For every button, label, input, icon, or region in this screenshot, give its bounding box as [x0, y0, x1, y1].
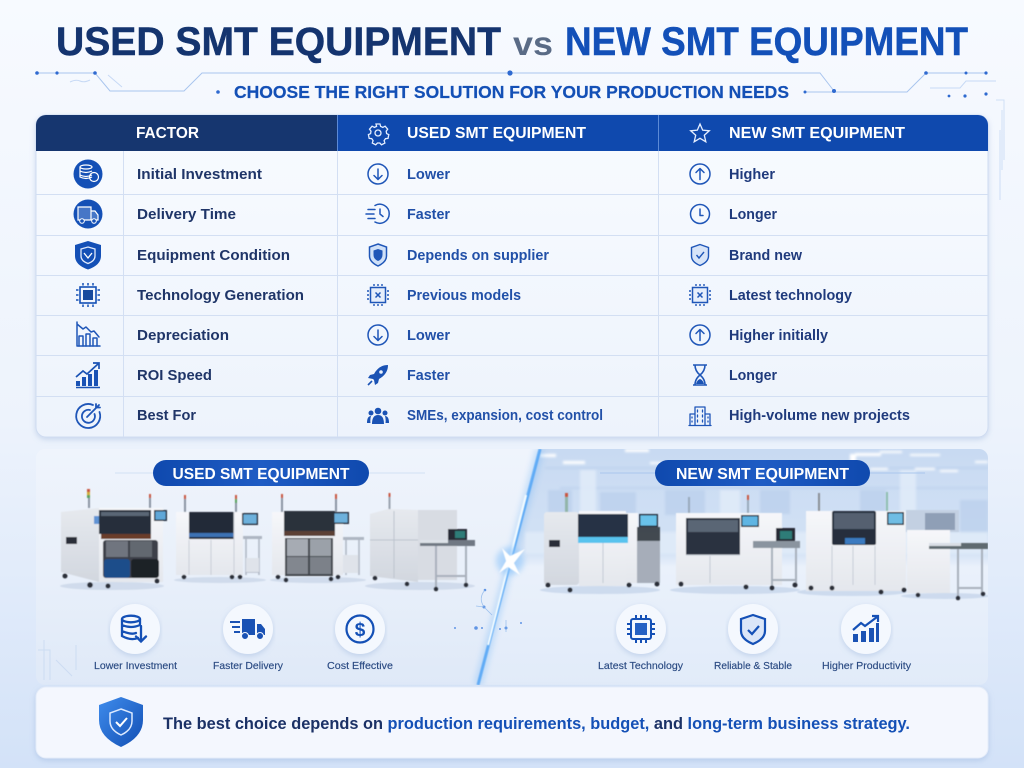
- circuit decoration: [35, 70, 1004, 200]
- callout: conclusion: The best choice depends on production requirements, budget, and long-term business strategy.: [163, 715, 910, 733]
- machine: used reflow: [365, 493, 475, 591]
- row: best for: Best For: [137, 408, 196, 424]
- machine: new placement: [670, 495, 800, 594]
- benefit: higher productivity: Higher Productivity: [822, 660, 912, 672]
- row: delivery time: Faster: [407, 207, 450, 223]
- subtitle: CHOOSE THE RIGHT SOLUTION FOR YOUR PRODUCTION NEEDS: [234, 82, 789, 102]
- row: depreciation: Higher initially: [729, 328, 828, 344]
- benefit: faster delivery: [213, 604, 284, 672]
- row: technology generation: Latest technology: [729, 288, 852, 304]
- icon: shield badge: [75, 241, 101, 270]
- title: USED SMT EQUIPMENT: [56, 20, 501, 64]
- icon: up arrow: [690, 325, 710, 345]
- table body: [36, 115, 988, 437]
- icon: down arrow: [368, 325, 388, 345]
- row: roi speed: Longer: [729, 368, 777, 384]
- title: vs: [513, 25, 553, 62]
- machine: used placement 1: [60, 489, 167, 590]
- row: delivery time: Delivery Time: [137, 207, 236, 223]
- row: depreciation: [77, 322, 828, 346]
- icon: buildings: [689, 407, 711, 426]
- row: technology generation: Technology Generation: [137, 288, 304, 304]
- row: technology generation: [76, 283, 852, 307]
- row: depreciation: Lower: [407, 328, 450, 344]
- icon: chip filled: [76, 283, 100, 307]
- machine: new placement 2: [797, 492, 907, 596]
- table header: new: [659, 115, 988, 151]
- row: delivery time: Longer: [729, 207, 777, 223]
- callout: conclusion: [36, 687, 988, 758]
- benefit: reliable and stable: [714, 604, 792, 672]
- icon: coins: [74, 160, 102, 188]
- icon: shield: [370, 244, 386, 266]
- icon: chip outline: [689, 284, 711, 306]
- icon: shield check: [692, 244, 708, 266]
- icon: fast clock: [366, 204, 389, 223]
- benefit: cost effective: [327, 604, 393, 672]
- benefit: faster delivery: Faster Delivery: [213, 660, 284, 672]
- benefit: higher productivity: [822, 604, 912, 672]
- row: initial investment: [74, 160, 775, 188]
- circuit decoration: lower left: [38, 640, 76, 680]
- machine: used printer: [174, 495, 266, 583]
- benefit: reliable and stable: Reliable & Stable: [714, 660, 792, 672]
- pill: used: [115, 460, 425, 486]
- row: equipment condition: Brand new: [729, 248, 803, 264]
- row: best for: SMEs, expansion, cost control: [407, 408, 603, 424]
- row: initial investment: Higher: [729, 167, 775, 183]
- table header: factor: FACTOR: [136, 125, 199, 142]
- machine: new reflow: [901, 510, 989, 600]
- icon: falling bars: [77, 322, 100, 346]
- panel: used background: [36, 449, 546, 685]
- benefit: cost effective: $: [355, 620, 366, 641]
- lightning divider: [454, 449, 540, 685]
- icon: truck: [74, 200, 102, 228]
- table header: used: [337, 115, 659, 151]
- row: delivery time: [74, 200, 777, 228]
- row: initial investment: Lower: [407, 167, 450, 183]
- icon: clock: [690, 204, 710, 224]
- icon: down arrow: [368, 164, 388, 184]
- pill: used: USED SMT EQUIPMENT: [172, 466, 350, 483]
- icon: up arrow: [690, 164, 710, 184]
- row: equipment condition: Depends on supplier: [407, 248, 549, 264]
- icon: chip outline: [367, 284, 389, 306]
- icon: shield check: [99, 697, 143, 747]
- row: technology generation: Previous models: [407, 288, 521, 304]
- benefit: lower investment: [94, 604, 177, 672]
- row: equipment condition: Equipment Condition: [137, 248, 290, 264]
- table header: factor: [36, 115, 337, 151]
- pill: new: NEW SMT EQUIPMENT: [676, 466, 849, 483]
- row: depreciation: Depreciation: [137, 328, 229, 344]
- row: equipment condition: [75, 241, 803, 270]
- machine: new printer: [540, 493, 660, 594]
- row: best for: [76, 404, 910, 428]
- panel: new background with cleanroom: [515, 449, 988, 562]
- icon: rising chart: [76, 363, 100, 388]
- icon: hourglass: [693, 365, 707, 385]
- table header: new: NEW SMT EQUIPMENT: [729, 125, 906, 142]
- icon: target: [76, 404, 100, 428]
- benefit: cost effective: Cost Effective: [327, 660, 393, 672]
- pill: new: [600, 460, 925, 486]
- title: [56, 20, 968, 64]
- title: NEW SMT EQUIPMENT: [565, 20, 968, 64]
- row: best for: High-volume new projects: [729, 408, 910, 424]
- icon: people: [367, 408, 389, 424]
- row: roi speed: Faster: [407, 368, 450, 384]
- benefit: latest technology: [598, 604, 684, 672]
- row: roi speed: [76, 363, 777, 388]
- row: initial investment: Initial Investment: [137, 167, 262, 183]
- machine: used placement 2: [270, 494, 366, 583]
- comparison table: [36, 115, 988, 437]
- icon: rocket: [368, 365, 388, 385]
- table header: used: USED SMT EQUIPMENT: [407, 125, 587, 142]
- benefit: latest technology: Latest Technology: [598, 660, 684, 672]
- row: roi speed: ROI Speed: [137, 368, 212, 384]
- panel: equipment comparison: [36, 449, 989, 685]
- benefit: lower investment: Lower Investment: [94, 660, 177, 672]
